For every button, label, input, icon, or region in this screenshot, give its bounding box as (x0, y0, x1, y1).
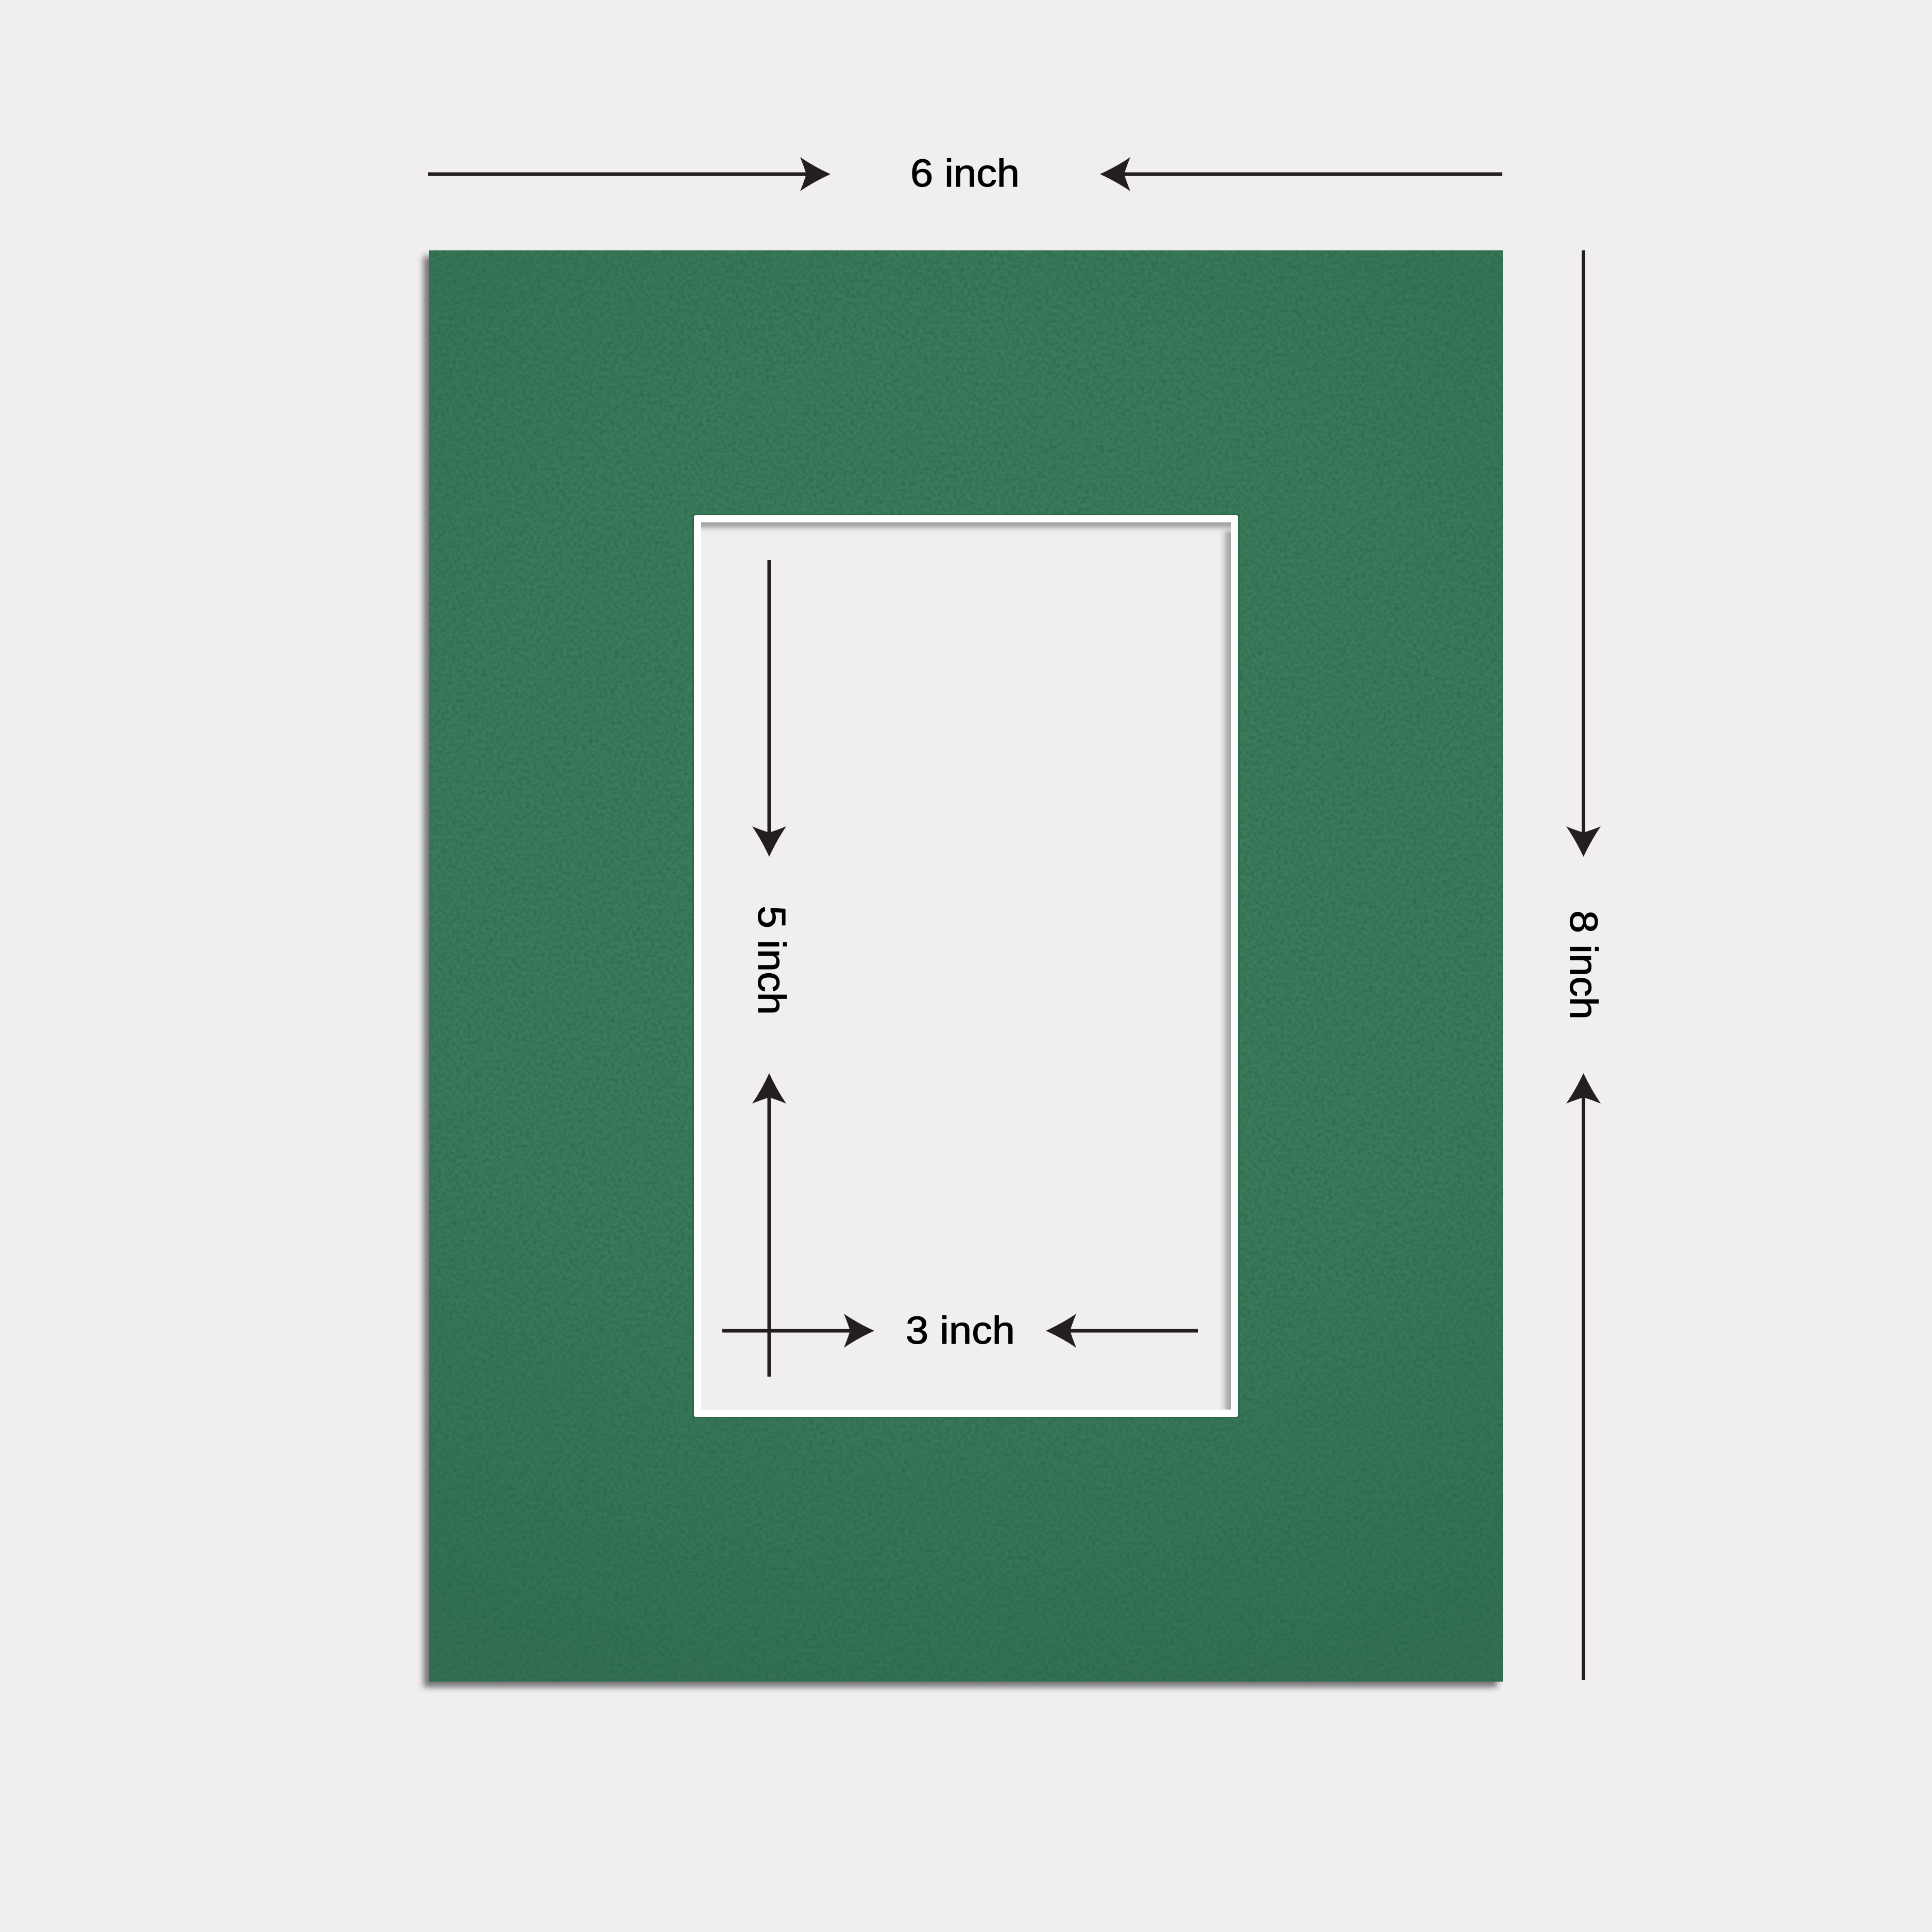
arrow: 6 inch right (1100, 157, 1502, 191)
arrow: 6 inch left (428, 157, 831, 191)
label: 5 inch: 5 inch (750, 906, 793, 1015)
arrow: 5 inch top (752, 560, 786, 857)
arrow: 8 inch bottom (1566, 1073, 1601, 1680)
label: 8 inch: 8 inch (1562, 910, 1605, 1020)
mat drop shadow (423, 256, 1497, 1687)
mat surface (429, 250, 1503, 1682)
label: 6 inch: 6 inch (910, 151, 1020, 195)
arrow: 3 inch right (1046, 1314, 1198, 1348)
label: 3 inch: 3 inch (906, 1309, 1015, 1352)
arrow: 8 inch top (1566, 250, 1601, 857)
arrow: 5 inch bottom (752, 1073, 786, 1377)
arrow: 3 inch left (722, 1314, 874, 1348)
window cut-out (692, 514, 1240, 1418)
panel: green mat board with window (423, 250, 1503, 1687)
